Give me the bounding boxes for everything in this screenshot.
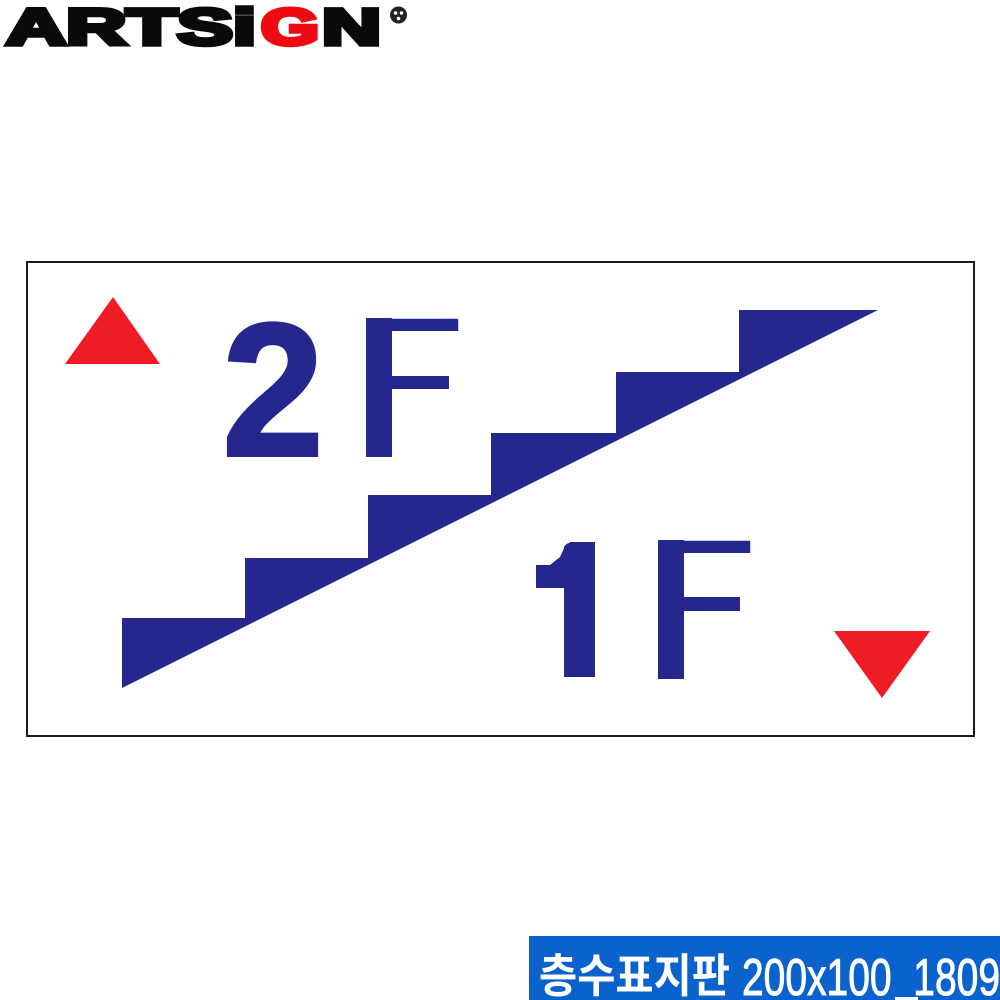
logo: ARTSiGN: [6, 0, 407, 56]
staircase diagram: [122, 310, 878, 688]
label: 2F: F: [352, 275, 465, 500]
label: 2F: 2: [222, 284, 324, 496]
logo: ARTSiGN: ARTSi: [6, 0, 256, 56]
caption banner: [529, 936, 1000, 1000]
icon: red up triangle: [65, 297, 160, 364]
label: 1F: F: [644, 497, 757, 722]
label: 2F: [222, 275, 465, 500]
label: 1F: 1: [536, 502, 608, 719]
logo: ARTSiGN: N: [322, 0, 381, 56]
label: 1F: [525, 497, 757, 722]
panel: sign board: [27, 262, 974, 736]
icon: red down triangle: [834, 631, 930, 698]
logo: ARTSiGN: G: [261, 0, 319, 56]
